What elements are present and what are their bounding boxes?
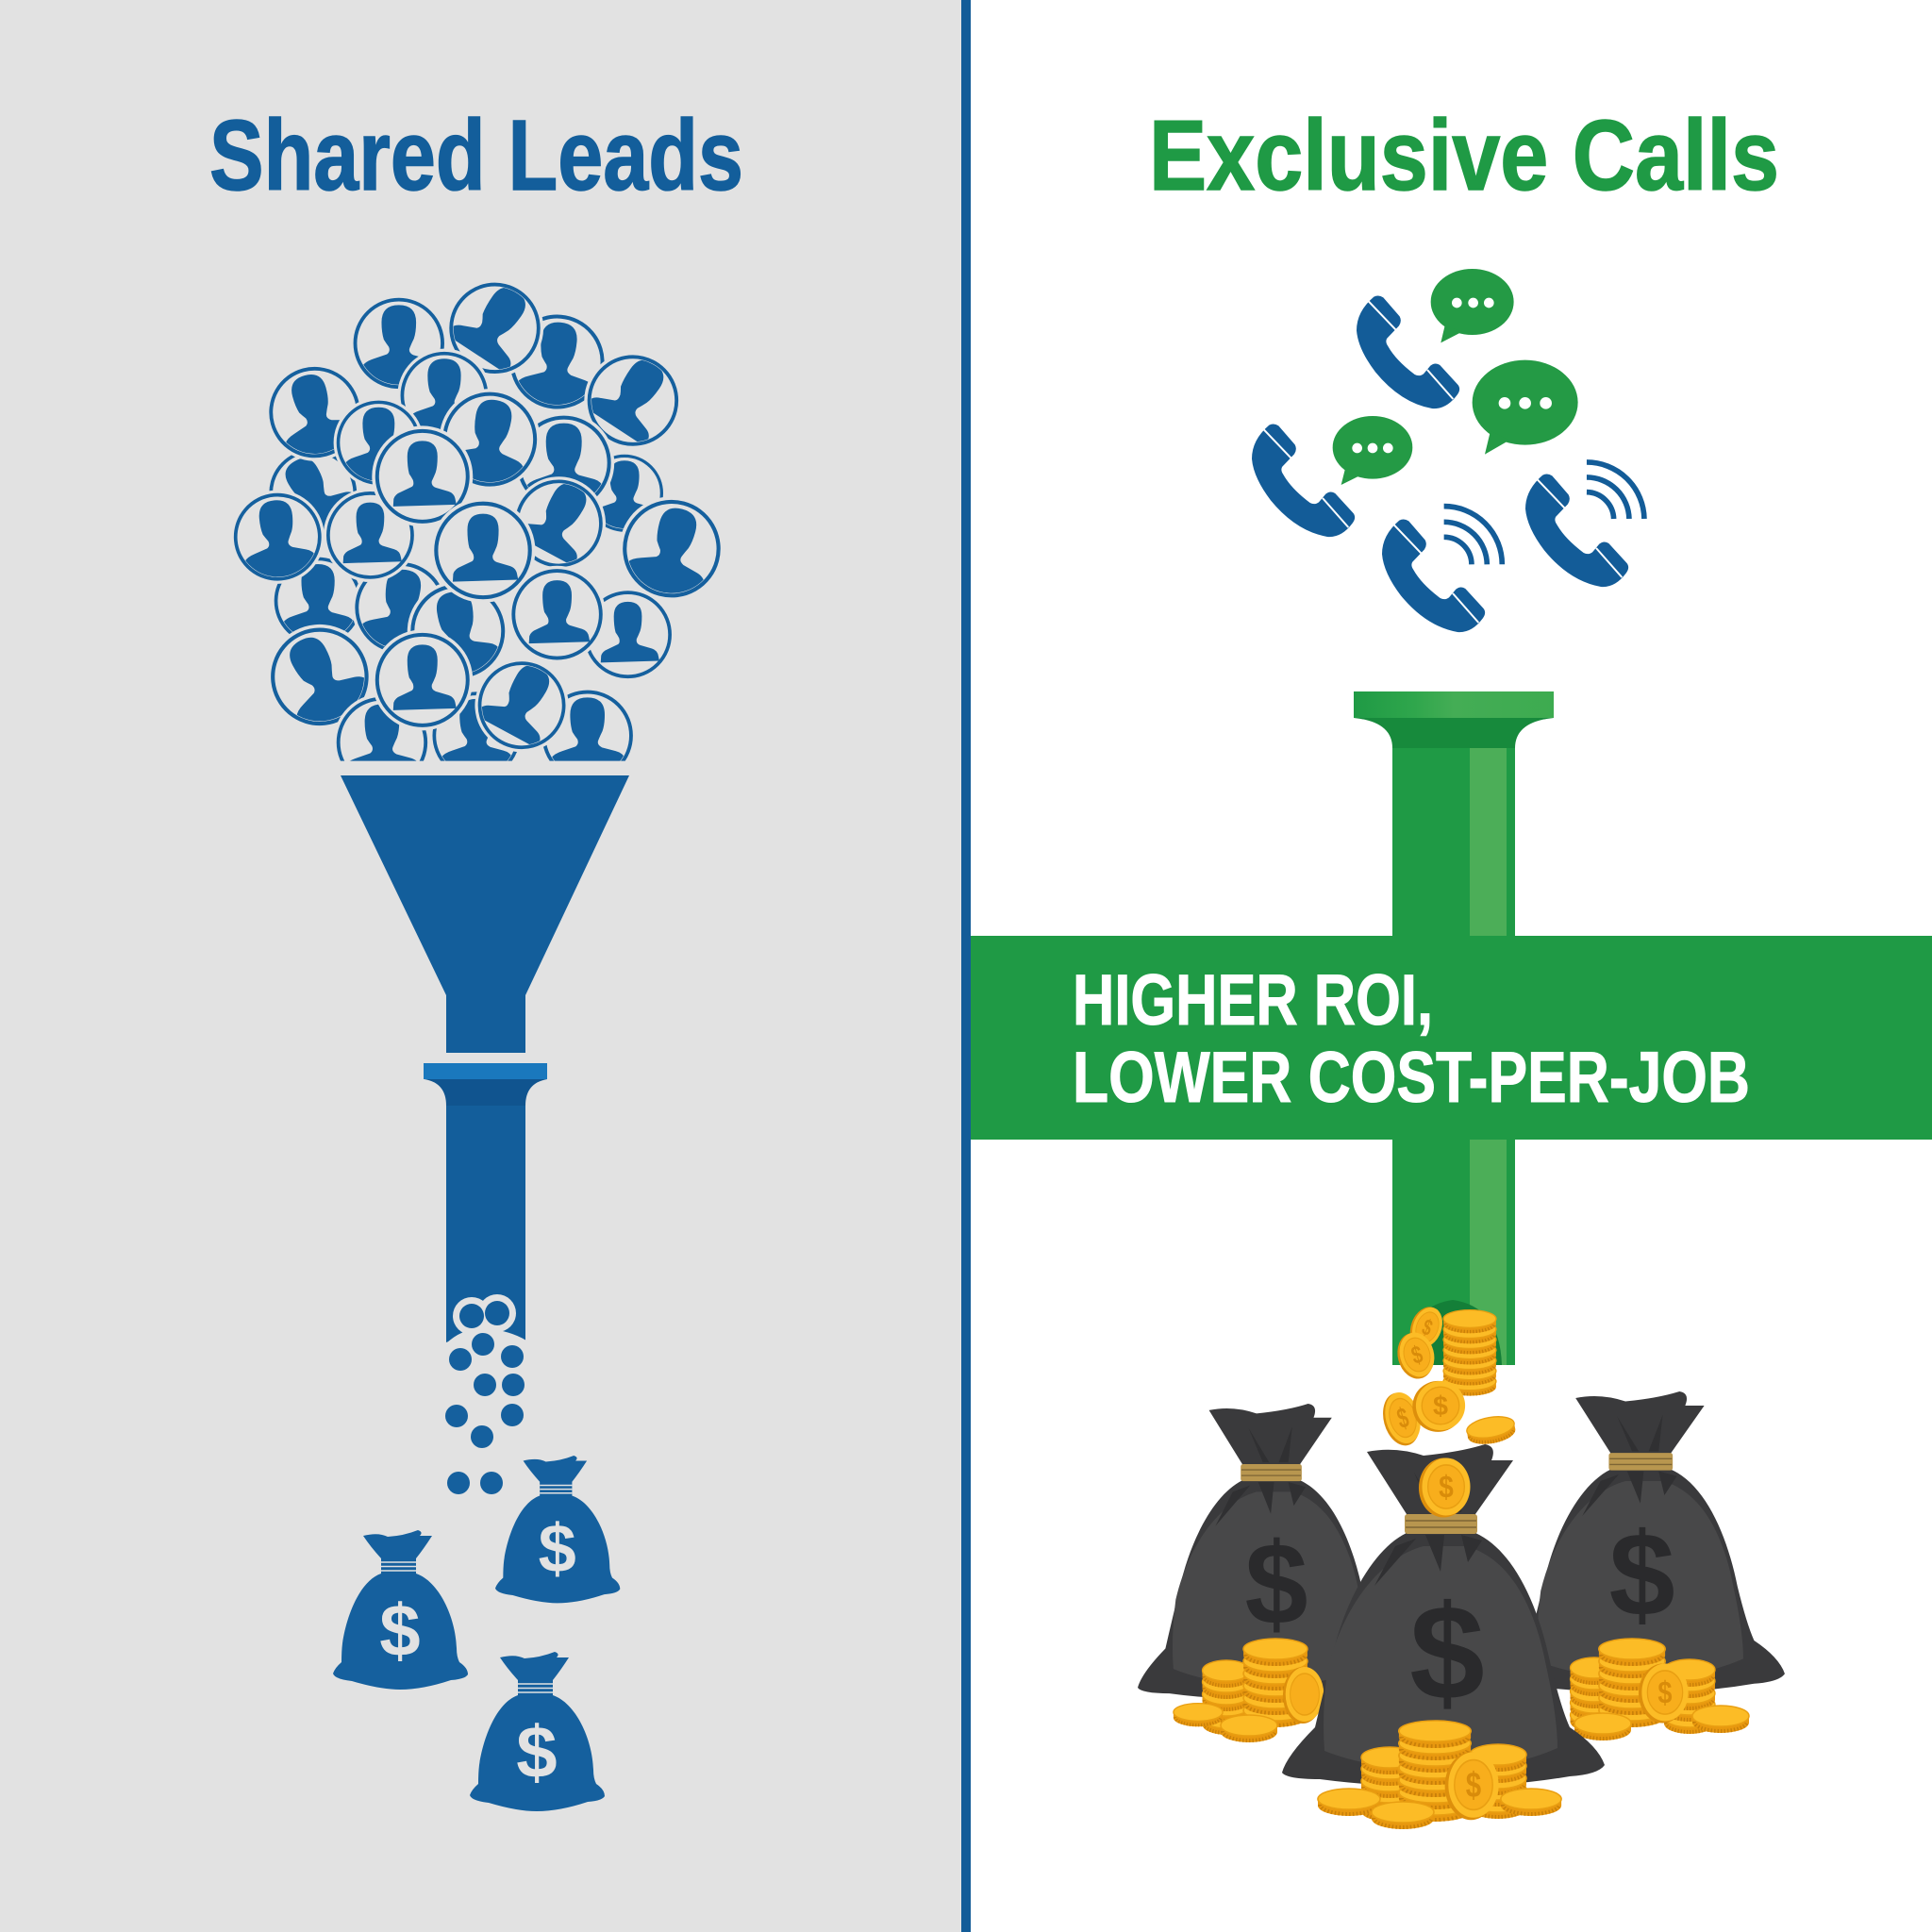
blue money bag: upper right: $ [539,1511,576,1587]
lead icon cluster [234,283,721,761]
green pipe [1354,691,1554,1365]
gold coins: right pile [1570,1639,1749,1740]
black money bag: right [1501,1391,1785,1692]
title: Shared Leads: Shared Leads [209,100,743,211]
black money bag: center [1282,1444,1605,1787]
banner text: LOWER COST-PER-JOB [1073,1038,1750,1118]
black money bag: right: $ [1609,1508,1675,1641]
blue money bag: left: $ [379,1589,421,1672]
blue money bag: bottom [470,1652,605,1811]
blue money bag: bottom: $ [516,1710,558,1793]
panel: shared leads background [0,0,961,1932]
blue funnel [341,775,629,1342]
blue money bag: left [333,1530,468,1690]
falling gold coins: $ [1419,1315,1436,1341]
banner text [1073,960,1750,1118]
gold coins: right pile: $ [1657,1675,1673,1710]
title: Exclusive Calls: Exclusive Calls [1149,100,1779,211]
banner text: HIGHER ROI, [1073,960,1433,1041]
leads dropping out of funnel [445,1294,526,1494]
blue money bag: upper right [495,1456,620,1603]
falling gold coins: $ [1408,1340,1425,1370]
black money bag: left [1138,1404,1408,1700]
falling gold coins: $ [1439,1469,1454,1505]
falling gold coins [1377,1303,1517,1518]
gold coins: left pile [1174,1639,1324,1742]
panel: exclusive calls background [971,0,1932,1932]
black money bag: center: $ [1409,1578,1485,1728]
gold coins: front pile [1318,1721,1561,1829]
gold coins: front pile: $ [1466,1766,1481,1806]
black money bag: left: $ [1245,1519,1307,1649]
banner [971,936,1932,1140]
falling gold coins: $ [1433,1391,1448,1422]
falling gold coins: $ [1394,1402,1412,1435]
phone and chat icons [1252,269,1644,632]
center divider [961,0,971,1932]
